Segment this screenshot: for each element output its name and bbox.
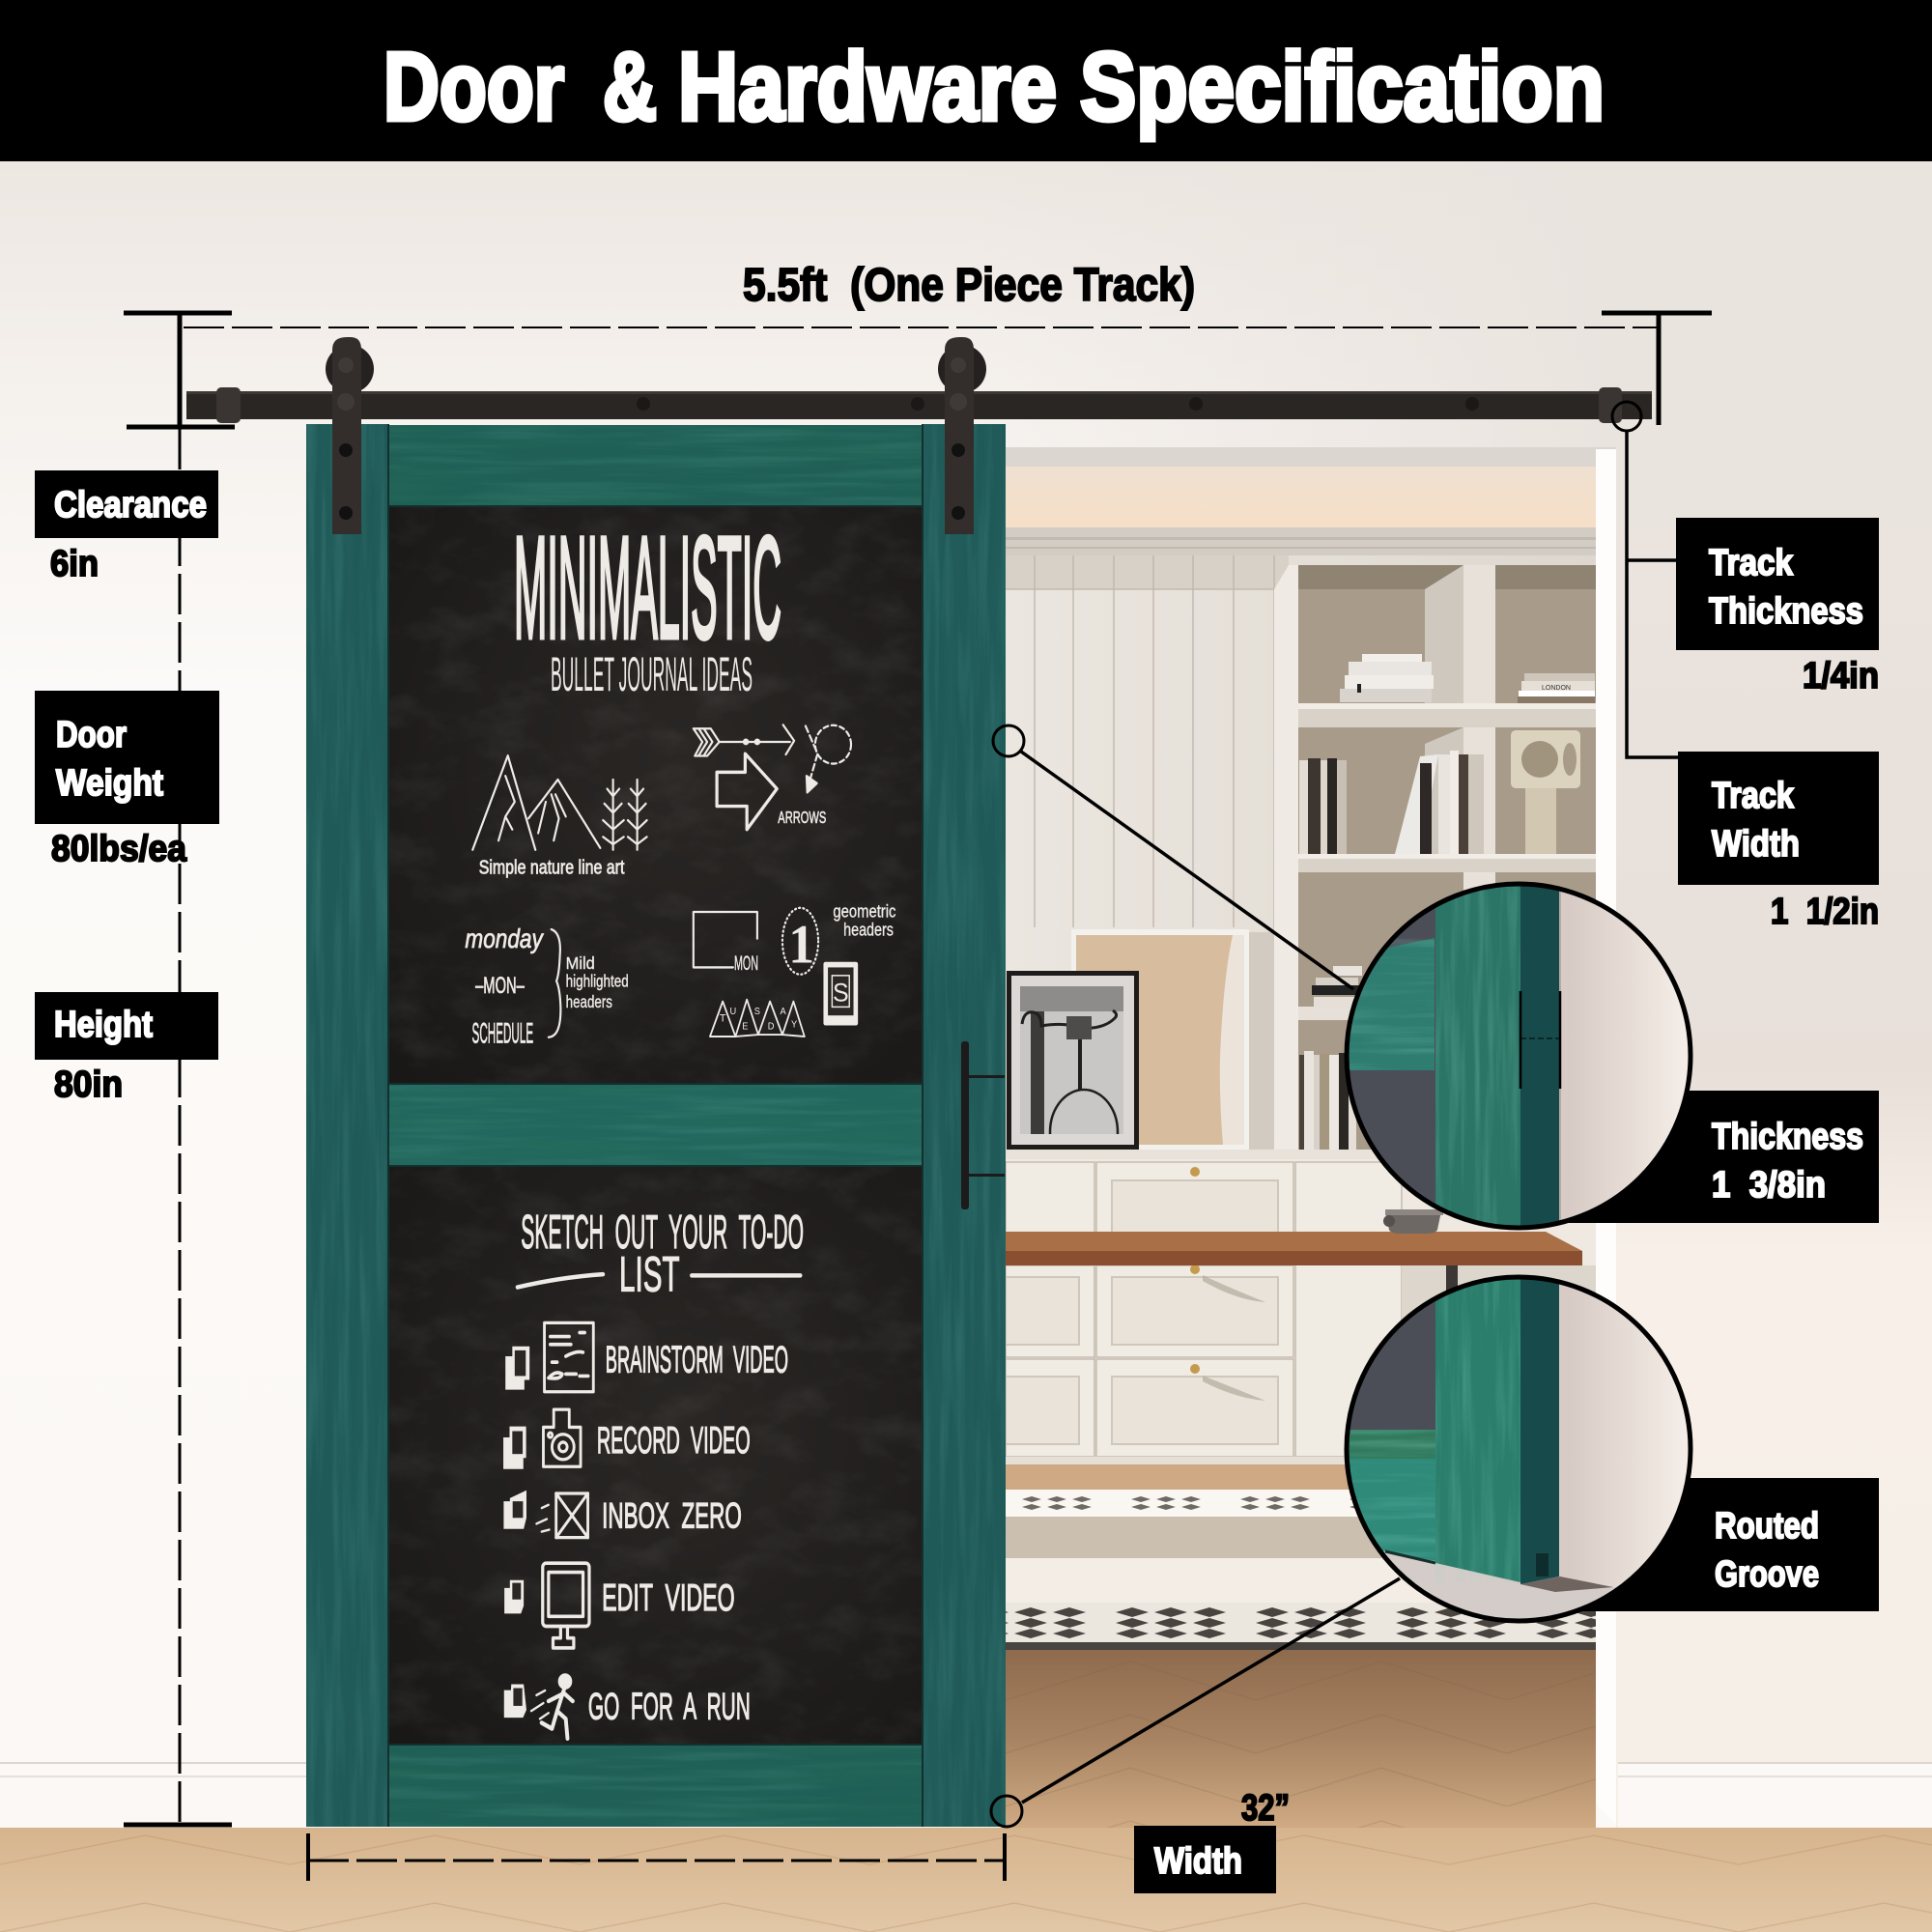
label: thickness: [1546, 1091, 1879, 1223]
label: door weight: 80lbs/ea: [51, 829, 187, 869]
label: door weight: Weight: [56, 763, 163, 804]
door pull handle: [961, 1041, 1005, 1209]
arrows: [694, 724, 851, 830]
width dimension line: [308, 1833, 1005, 1881]
right wall section: [1616, 449, 1932, 1831]
label: track width: [1678, 752, 1879, 932]
sliding barn door: [306, 424, 1006, 1827]
label: door width: 32”: [1241, 1788, 1290, 1829]
item 2: [503, 1409, 751, 1469]
item 4: [504, 1563, 735, 1648]
mountains and trees: [472, 755, 647, 850]
label: thickness: 1 3/8in: [1712, 1165, 1826, 1206]
title: &: [603, 33, 657, 141]
cabinets and drawers: [1006, 1150, 1596, 1464]
leader: thickness detail: [993, 725, 1353, 989]
right stile: [923, 424, 1006, 1827]
baseboard left: [0, 1762, 306, 1828]
books second shelf left: [1299, 758, 1347, 854]
inset ring: [1347, 1277, 1690, 1621]
label: routed groove: Groove: [1715, 1554, 1819, 1595]
title: Specification: [1080, 33, 1605, 141]
doorway room scene: [1006, 447, 1616, 1828]
brace: [549, 929, 560, 1037]
books second shelf centre: [1395, 751, 1484, 854]
mon box header: [694, 912, 757, 967]
chalk drawing: to-do list: [503, 1205, 804, 1739]
label: clearance: Clearance: [54, 485, 207, 526]
item 5: GO FOR A RUN: [588, 1685, 751, 1727]
label: track width: Track: [1712, 776, 1795, 816]
left stile: [306, 424, 389, 1827]
geometric caption: headers: [843, 920, 894, 940]
label: track thickness: 1/4in: [1803, 656, 1879, 696]
ceiling light cove: [1006, 467, 1596, 527]
tuesday bunting: E: [742, 1021, 748, 1032]
item 3: [503, 1491, 742, 1538]
label: routed groove: [1546, 1478, 1879, 1611]
text: BULLET JOURNAL IDEAS: [551, 647, 753, 701]
label: thickness: Thickness: [1712, 1117, 1863, 1157]
tuesday bunting: A: [781, 1007, 786, 1017]
item 4: EDIT VIDEO: [602, 1577, 735, 1619]
label: track thickness: [1676, 518, 1879, 696]
label: door weight: [35, 691, 219, 869]
mon text: MON: [734, 952, 758, 975]
geometric caption: [833, 901, 896, 940]
wood table top: [1006, 1232, 1582, 1304]
upper chalkboard panel: [389, 506, 923, 1084]
inset: routed groove detail: [1345, 1275, 1692, 1633]
tuesday bunting: Y: [791, 1019, 798, 1031]
chalk drawing: line art and headers: SCHEDULE: [472, 1018, 533, 1050]
top rail: [389, 425, 923, 506]
item 2: RECORD VIDEO: [597, 1419, 751, 1461]
chalk drawing: minimalistic heading: [514, 506, 781, 701]
label: height: Height: [54, 1005, 153, 1045]
left track stop: [216, 387, 241, 423]
arrows caption: ARROWS: [778, 809, 826, 827]
book stack third shelf: [1312, 966, 1362, 1007]
bicycle photo frame: [1007, 971, 1139, 1150]
bottom rail: [389, 1745, 923, 1827]
shelving unit: [1274, 565, 1596, 1154]
bowl on table: [1383, 1209, 1443, 1234]
headers caption: headers: [566, 992, 612, 1011]
item 1: BRAINSTORM VIDEO: [606, 1338, 788, 1380]
item 5: [504, 1675, 751, 1739]
label: height: 80in: [54, 1065, 123, 1105]
left roller hanger: [326, 337, 374, 534]
header bar: [0, 0, 1932, 161]
nature caption: Simple nature line art: [479, 858, 625, 879]
tuesday bunting: U: [730, 1007, 736, 1017]
tuesday bunting: D: [768, 1021, 775, 1032]
room floor and rug: [1006, 1464, 1596, 1828]
tuesday bunting: T: [720, 1012, 726, 1025]
headers caption: Mild: [566, 953, 595, 973]
title: Hardware: [678, 33, 1057, 141]
book stack right shelf: LONDON: [1542, 685, 1571, 692]
title: [384, 33, 1605, 141]
sculpture: [1511, 730, 1580, 854]
book stack top shelf: [1340, 654, 1434, 702]
tuesday bunting: [710, 1000, 805, 1037]
room back wall panelling: [1006, 449, 1596, 1154]
label: clearance: [35, 470, 218, 584]
s square badge: [823, 962, 858, 1026]
item 1: [505, 1322, 788, 1392]
list word with rules: [518, 1248, 801, 1302]
right roller hanger: [938, 337, 986, 534]
track bolts: [637, 397, 1479, 411]
inset ring: [1347, 884, 1690, 1228]
baseboard right: [1618, 1762, 1932, 1828]
door casing right: [1596, 449, 1616, 1824]
label: clearance: 6in: [50, 544, 99, 584]
thickness ticks: [1520, 991, 1560, 1089]
chalk drawing: line art and headers: [465, 724, 896, 1050]
track connector: [1612, 402, 1678, 757]
upper wall shading: [966, 161, 1932, 449]
text: SKETCH OUT YOUR TO-DO: [521, 1205, 804, 1258]
label: door weight: Door: [56, 715, 127, 755]
book stack right shelf: [1518, 673, 1595, 703]
label: track width: 1 1/2in: [1771, 892, 1879, 932]
title: Door: [384, 33, 564, 141]
crown moulding: [1006, 527, 1596, 555]
item 3: INBOX ZERO: [602, 1497, 742, 1536]
number one badge: [782, 908, 818, 976]
height dimension line: [124, 429, 232, 1825]
bicycle: [1020, 986, 1123, 1134]
label: track thickness: Track: [1709, 543, 1794, 583]
leader: groove detail: [991, 1578, 1400, 1827]
lower chalkboard panel: [389, 1166, 923, 1745]
door trim top: [1006, 447, 1616, 467]
label: door width: [1134, 1788, 1290, 1893]
wainscot grooves: [1006, 555, 1274, 966]
right track stop: [1599, 387, 1622, 423]
front wood floor: [0, 1828, 1932, 1932]
track length label: 5.5ft (One Piece Track): [743, 260, 1195, 311]
headers caption: highlighted: [566, 972, 629, 990]
chalk drawing: line art and headers: –MON–: [475, 973, 525, 998]
number one badge: 1: [788, 915, 814, 976]
middle rail: [389, 1084, 923, 1166]
label: height: [35, 992, 218, 1105]
s square badge: S: [833, 980, 849, 1008]
barn door track: [186, 387, 1652, 423]
list word with rules: LIST: [619, 1248, 680, 1302]
books fourth shelf: [1299, 1051, 1356, 1150]
text: MINIMALISTIC: [514, 506, 781, 668]
label: door width: Width: [1154, 1841, 1242, 1882]
label: track width: Width: [1712, 824, 1800, 865]
geometric caption: geometric: [833, 901, 896, 922]
top dimension lines: [124, 313, 1712, 427]
schedule headers: monday: [465, 923, 544, 953]
tuesday bunting: S: [754, 1007, 760, 1017]
tan art print: [1071, 929, 1274, 1150]
inset: door thickness detail: [1345, 882, 1692, 1230]
label: track thickness: Thickness: [1709, 591, 1863, 632]
headers caption: [566, 953, 629, 1011]
label: routed groove: Routed: [1715, 1506, 1819, 1547]
